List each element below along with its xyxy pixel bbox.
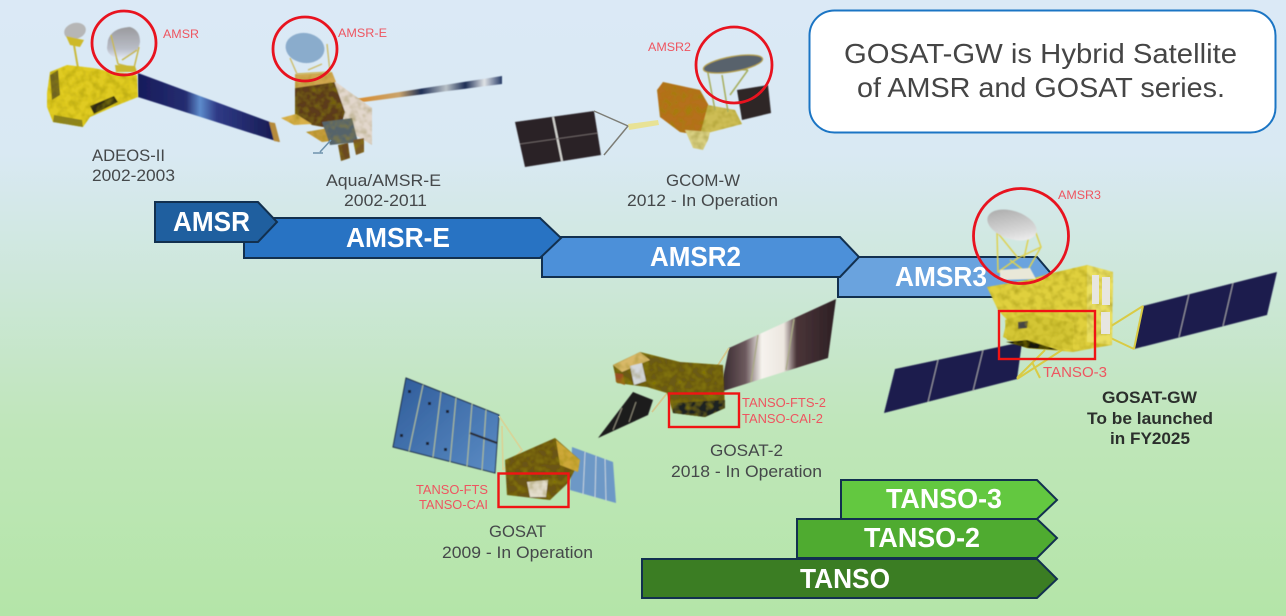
satellite: ADEOS-II xyxy=(47,11,280,185)
highlight circle xyxy=(696,27,772,103)
small antenna xyxy=(62,20,88,68)
arrow: TANSO-2: TANSO-2 xyxy=(864,522,980,553)
label: TANSO-FTS-2 / TANSO-CAI-2: TANSO-CAI-2 xyxy=(742,411,823,426)
TANSO-3 module xyxy=(1005,313,1073,350)
rear panel xyxy=(737,85,771,120)
arrow: AMSR2: AMSR2 xyxy=(650,241,741,272)
satellite: GOSAT xyxy=(393,378,616,562)
caption: To be launched xyxy=(1087,410,1213,428)
caption xyxy=(671,441,822,481)
caption xyxy=(627,171,778,210)
solar wing xyxy=(355,76,502,103)
AMSR dish xyxy=(107,27,140,72)
caption xyxy=(442,522,593,562)
caption xyxy=(326,171,441,210)
arrow: AMSR2 xyxy=(542,237,859,277)
caption xyxy=(1087,389,1213,448)
arrow: AMSR-E xyxy=(244,218,561,258)
arrow: AMSR xyxy=(155,202,277,242)
instrument highlight box xyxy=(999,311,1095,359)
struts xyxy=(499,416,522,470)
body xyxy=(505,438,580,500)
struts xyxy=(652,348,729,412)
arrow: TANSO-3 xyxy=(841,480,1057,519)
callout: hybrid satellite statement: GOSAT-GW is Hybrid Satellite xyxy=(844,38,1237,69)
arrow: TANSO-2 xyxy=(797,519,1057,558)
caption: GOSAT-2 xyxy=(710,441,783,460)
rear solar panel xyxy=(570,447,616,503)
arrow: TANSO-3: TANSO-3 xyxy=(886,483,1002,514)
satellite: GOSAT-GW xyxy=(884,188,1277,448)
arrow: AMSR: AMSR xyxy=(173,206,250,237)
callout: hybrid satellite statement xyxy=(810,10,1276,132)
AMSR3 dish xyxy=(983,204,1041,280)
AMSR series timeline arrows xyxy=(155,202,1054,297)
arrow: AMSR3: AMSR3 xyxy=(895,261,987,292)
highlight circle xyxy=(974,188,1068,284)
label: TANSO-FTS / TANSO-CAI: TANSO-FTS xyxy=(416,482,488,497)
body xyxy=(613,352,725,417)
caption: 2002-2011 xyxy=(344,191,427,210)
caption: GOSAT-GW xyxy=(1102,389,1197,407)
satellite: Aqua xyxy=(273,17,502,210)
highlight circle xyxy=(92,11,156,75)
label: TANSO-FTS-2 / TANSO-CAI-2: TANSO-FTS-2 xyxy=(742,395,826,410)
arrow: TANSO: TANSO xyxy=(800,563,890,594)
label: TANSO-FTS-2 / TANSO-CAI-2 xyxy=(742,395,826,426)
caption: 2018 - In Operation xyxy=(671,462,822,481)
arrow: AMSR3 xyxy=(838,257,1054,297)
arrow: AMSR-E: AMSR-E xyxy=(346,222,450,253)
caption: 2002-2003 xyxy=(92,166,175,185)
body xyxy=(47,65,138,127)
label: TANSO-3: TANSO-3 xyxy=(1043,364,1107,381)
TANSO series timeline arrows xyxy=(642,480,1057,598)
body xyxy=(987,265,1113,352)
label: TANSO-FTS / TANSO-CAI xyxy=(416,482,488,512)
satellite: GCOM-W xyxy=(515,27,778,210)
caption: Aqua/AMSR-E xyxy=(326,171,441,190)
caption: 2012 - In Operation xyxy=(627,191,778,210)
label: AMSR2: AMSR2 xyxy=(648,40,691,54)
radiator panels xyxy=(1092,275,1110,334)
main solar panel xyxy=(720,299,836,392)
struts xyxy=(1017,306,1143,379)
highlight circle xyxy=(273,17,337,81)
caption: in FY2025 xyxy=(1110,430,1190,448)
caption: GOSAT xyxy=(489,522,546,541)
lower solar panel xyxy=(598,392,653,438)
solar panel xyxy=(138,73,280,142)
arrow: TANSO xyxy=(642,559,1057,598)
AMSR2 dish xyxy=(702,51,764,112)
right solar panel xyxy=(1134,272,1277,349)
caption: GCOM-W xyxy=(666,171,740,190)
large solar panel xyxy=(515,111,601,167)
main solar panel xyxy=(393,378,499,473)
caption: ADEOS-II xyxy=(92,146,165,165)
label: AMSR: AMSR xyxy=(163,27,199,41)
satellite: GOSAT-2 xyxy=(598,299,836,481)
left solar panel xyxy=(884,342,1022,413)
boom xyxy=(594,111,628,155)
label: TANSO-FTS / TANSO-CAI: TANSO-CAI xyxy=(419,497,488,512)
antenna xyxy=(313,140,331,153)
instrument highlight box xyxy=(669,394,739,427)
caption: 2009 - In Operation xyxy=(442,543,593,562)
body xyxy=(657,82,742,150)
callout: hybrid satellite statement: of AMSR and GOSAT series. xyxy=(857,72,1225,103)
label: AMSR-E: AMSR-E xyxy=(338,26,387,40)
caption xyxy=(92,146,175,185)
instrument highlight box xyxy=(498,474,568,507)
body xyxy=(281,72,372,161)
label: AMSR3: AMSR3 xyxy=(1058,188,1101,202)
AMSR-E dish xyxy=(284,30,330,74)
